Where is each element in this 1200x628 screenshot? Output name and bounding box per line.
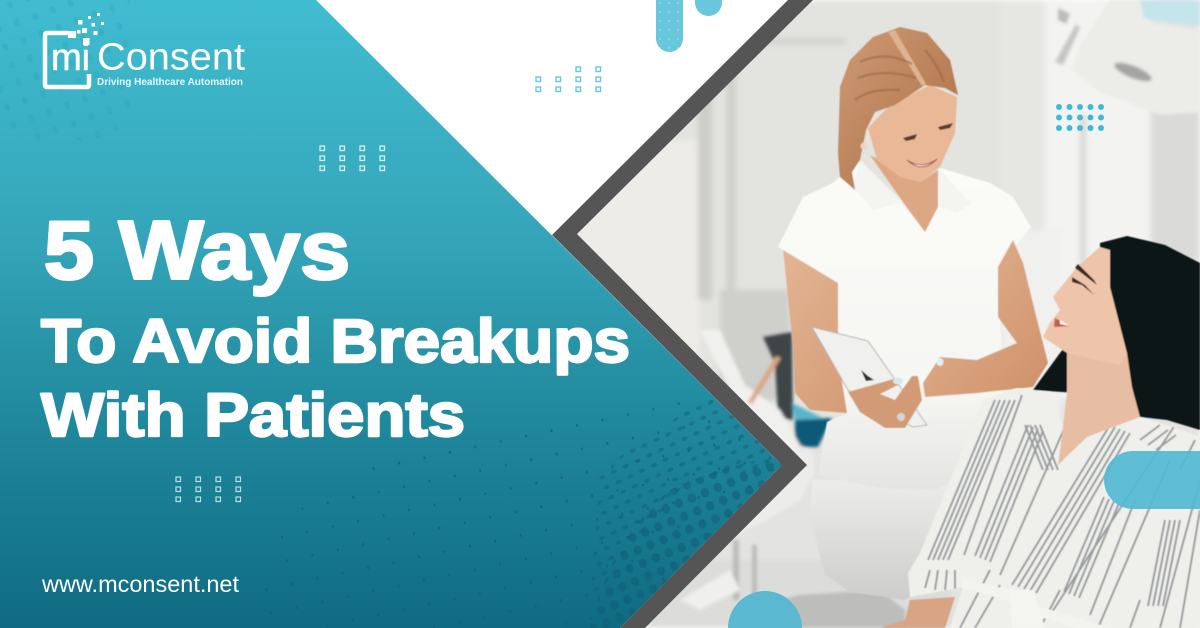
- dentist right arm: [923, 240, 1048, 397]
- logo tagline: Driving Healthcare Automation: [97, 76, 243, 88]
- dentist face: [868, 85, 957, 182]
- decoration: white square grid on teal lower: [176, 477, 240, 502]
- patient striped shirt: [908, 388, 1200, 628]
- photo: overhead dental lamp: [1055, 0, 1200, 115]
- heading line 2: To Avoid Breakups: [41, 307, 630, 375]
- decoration: bottom circle: [728, 591, 802, 628]
- dentist shirt: [778, 160, 1031, 490]
- decoration: teal dot grid on photo: [1056, 104, 1104, 131]
- patient shirt stripes: [925, 395, 1200, 628]
- decoration: white square grid on teal upper: [320, 146, 384, 170]
- dentist eyes and smile: [903, 123, 953, 141]
- logo pixel squares: [68, 13, 104, 45]
- decoration: teal square grid on white: [536, 67, 600, 92]
- dentist trousers: [810, 480, 950, 600]
- dentist neck: [870, 155, 938, 232]
- dentist left arm: [782, 250, 848, 414]
- patient hair: [1033, 236, 1200, 430]
- logo mi: mi: [51, 37, 90, 79]
- heading line 3: With Patients: [41, 381, 465, 449]
- logo: mConsent: [45, 13, 245, 88]
- photo: dark chair and blue seat behind dentist: [680, 330, 905, 628]
- decoration: short hanging pill: [695, 0, 722, 16]
- heading: 5 Ways To Avoid Breakups With Patients: [41, 204, 630, 449]
- halftone dots sparse: [250, 400, 790, 628]
- website url: www.mconsent.net: [41, 571, 240, 597]
- halftone dots large: [590, 455, 790, 628]
- decoration: right side pill: [1104, 451, 1200, 509]
- panel: photo of dentist and patient: [560, 0, 1200, 628]
- dentist hair: [838, 27, 958, 190]
- dentist hand on tablet: [848, 376, 922, 428]
- patient face: [1043, 247, 1127, 365]
- halftone dots medium band: [590, 400, 790, 600]
- logo tablet frame: [45, 33, 89, 87]
- tablet: [812, 327, 927, 427]
- patient forearm: [880, 597, 955, 628]
- halftone dots top left: [8, 0, 130, 10]
- decoration: long hanging pill: [656, 0, 683, 52]
- photo: dentist: [778, 27, 1048, 600]
- photo: patient: [880, 236, 1200, 628]
- panel: teal gradient diagonal: [0, 0, 790, 628]
- heading line 1: 5 Ways: [44, 204, 350, 296]
- logo Consent wordmark: Consent: [97, 36, 245, 78]
- photo: clinic background: [560, 0, 1200, 628]
- dentist polo collar: [859, 160, 939, 202]
- patient belt: [977, 582, 1101, 628]
- panel: dark grey chevron band: [552, 0, 813, 628]
- patient neck: [1058, 353, 1140, 465]
